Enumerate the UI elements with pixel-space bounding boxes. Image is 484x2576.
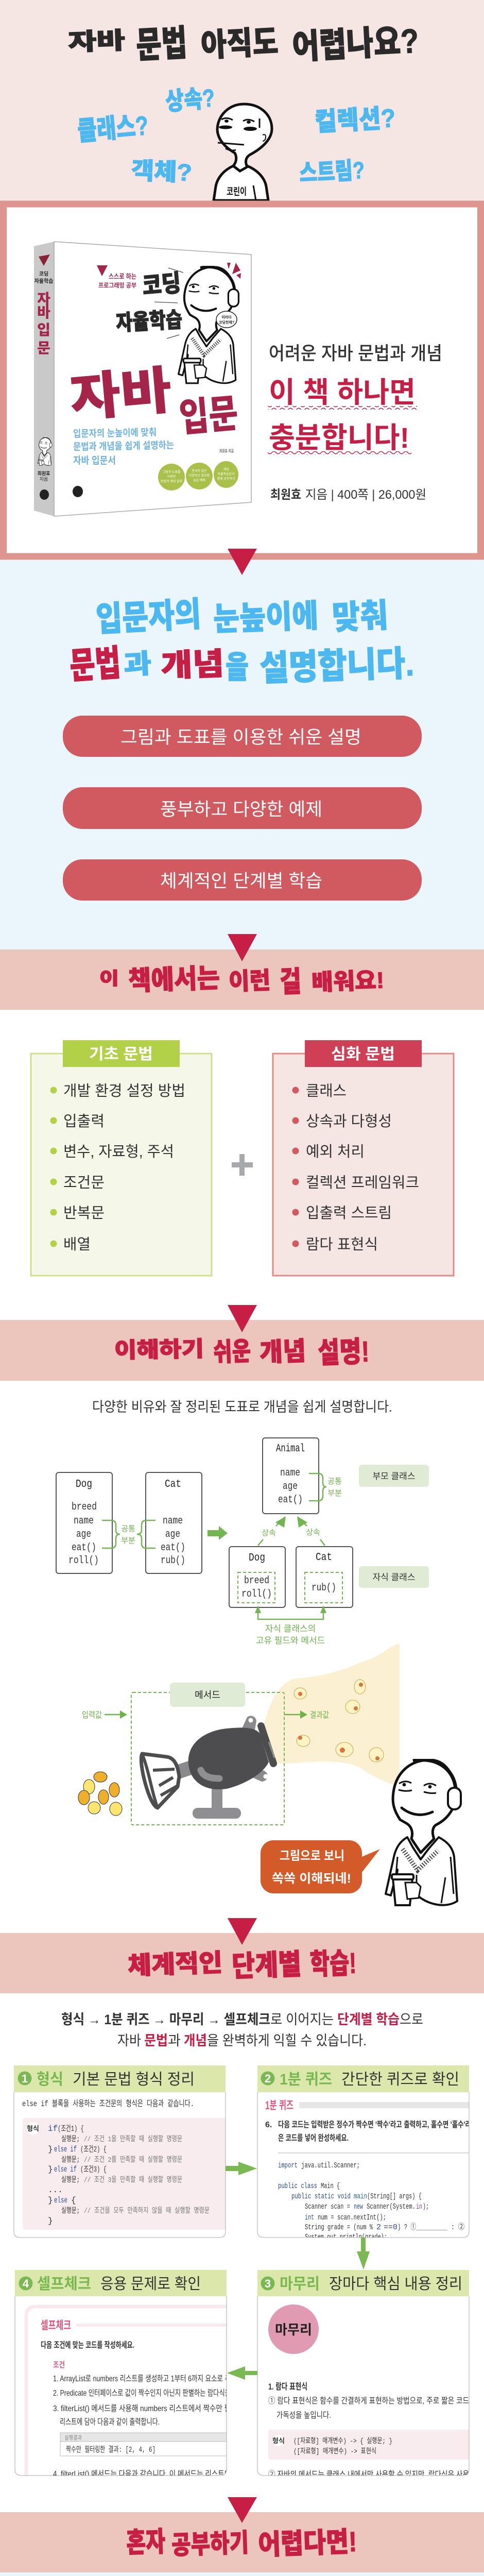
panel: step 4 self check: 4 xyxy=(23,2277,29,2290)
panel: step 1 format: // 조건 2를 만족할 때 실행할 명령문 xyxy=(84,2156,182,2164)
heading: step learning: 학습! xyxy=(309,1946,357,1981)
panel: step 2 quiz: == xyxy=(384,2223,393,2232)
panel: advanced grammar: 람다 표현식 xyxy=(306,1236,378,1253)
title: java grammar still hard: 자바 xyxy=(67,27,126,56)
text: step description: 로 이어지는 xyxy=(270,2012,334,2027)
book: java intro cover: 문법과 개념 설명 xyxy=(161,479,182,483)
icon: character kkorini: 코린이 xyxy=(227,186,247,197)
book: java intro cover: 다양하고 풍부한 xyxy=(189,473,210,478)
panel: basic grammar: 개발 환경 설정 방법 xyxy=(63,1083,185,1099)
panel: basic grammar: 입출력 xyxy=(63,1113,105,1130)
panel: step 2 quiz: System.out.println(grade); xyxy=(305,2233,387,2242)
heading: explain grammar and concepts: 문법 xyxy=(68,643,122,686)
book: java intro cover: 이용한 xyxy=(167,474,176,479)
panel: step 1 format: 실행문; xyxy=(61,2207,80,2215)
heading: explain grammar and concepts: 과 xyxy=(123,649,152,680)
panel: step 4 self check: 짝수만 필터링한 결과: [2, 4, 6] xyxy=(66,2445,155,2454)
heading: easy concepts: 이해하기 xyxy=(114,1336,204,1363)
panel: book frame xyxy=(3,204,481,556)
book: java intro cover: 한국어 같은 xyxy=(192,469,207,473)
heading: what you learn: 이 xyxy=(99,969,119,989)
panel: step 2 quiz: 6. xyxy=(265,2121,272,2129)
panel: step 1 format: else xyxy=(54,2196,67,2205)
panel: step 4 self check: 응용 문제로 확인 xyxy=(100,2276,201,2293)
panel: step 1 format: if xyxy=(48,2124,58,2133)
panel: step 1 format: else if xyxy=(54,2145,77,2154)
arrow: triangle xyxy=(228,1918,257,1945)
question words: 상속? xyxy=(164,84,216,116)
book: java intro cover: 코딩 xyxy=(141,269,182,299)
diagram: class inheritance: breed xyxy=(244,1575,269,1587)
panel: basic grammar: 배열 xyxy=(63,1236,91,1253)
book: java intro cover: 자율학습 xyxy=(115,308,183,335)
panel: step 2 quiz: 1분 퀴즈 xyxy=(265,2099,293,2112)
panel: step 2 quiz: num = scan.nextInt(); xyxy=(318,2213,386,2222)
book: java intro cover: 바 xyxy=(37,304,50,320)
text: step description: 과 xyxy=(168,2033,181,2048)
feature pills: 풍부하고 다양한 예제 xyxy=(160,800,322,820)
panel: step 1 format: else if 블록을 사용하는 조건문의 형식은 다음과 같습니다. xyxy=(22,2099,194,2109)
panel: step 3 summary: 형식 xyxy=(272,2437,285,2445)
diagram: class inheritance: eat() xyxy=(161,1542,185,1554)
panel: basic grammar: 변수, 자료형, 주석 xyxy=(63,1143,174,1160)
panel: step 4 self check: 셀프체크 xyxy=(41,2319,71,2332)
callout: speech bubble: 쏙쏙 이해되네! xyxy=(272,1872,351,1886)
question words: 클래스? xyxy=(76,111,150,147)
section background: concept xyxy=(0,560,484,950)
text: step description: 개념 xyxy=(184,2033,207,2048)
panel: step 4 self check: 1. ArrayList로 numbers 리스트를 생성하고 1부터 6까지 요소로 추 xyxy=(53,2374,231,2383)
title: java grammar still hard: 문법 xyxy=(135,23,188,66)
question words: 객체? xyxy=(131,157,193,186)
book: java intro cover: 스스로 하는 xyxy=(109,273,136,280)
diagram: class inheritance: age xyxy=(76,1529,91,1540)
panel: advanced grammar: 심화 문법 xyxy=(331,1046,395,1063)
panel: step 2 quiz: import xyxy=(278,2161,298,2170)
book: java intro cover: 실습 예제 xyxy=(193,478,205,482)
panel: step 1 format: else if xyxy=(54,2165,77,2174)
panel: basic grammar: 반복문 xyxy=(63,1205,105,1222)
diagram: class inheritance: name xyxy=(280,1467,300,1479)
feature pills: 그림과 도표를 이용한 쉬운 설명 xyxy=(120,727,361,748)
panel: step 3 summary: ([자료형] 매개변수) -> 표현식 xyxy=(293,2447,376,2456)
panel: step 3 summary: 가독성을 높입니다. xyxy=(276,2411,331,2420)
arrow: step 2 to 3 xyxy=(357,2238,370,2269)
heading: studying alone xyxy=(126,2527,357,2561)
panel: step 2 quiz: Scanner(System. xyxy=(367,2202,416,2211)
heading: step learning: 체계적인 xyxy=(127,1950,223,1980)
panel: step 3 summary: 마무리 xyxy=(275,2322,312,2337)
panel: step 2 quiz: 0 xyxy=(393,2223,397,2232)
panel: step 4 self check: 리스트에 담아 다음과 같이 출력합니다. xyxy=(60,2417,160,2427)
arrow: triangle xyxy=(228,1305,257,1332)
panel: step 2 quiz: Scanner scan = xyxy=(305,2202,350,2211)
band: easy concepts xyxy=(0,1320,484,1381)
panel: step 3 summary: 마무리 xyxy=(280,2276,320,2293)
panel: step 1 format: 형식 xyxy=(27,2125,39,2132)
heading: easy concepts xyxy=(114,1335,370,1369)
panel: step 1 format: (조건1) { xyxy=(58,2124,84,2133)
diagram: class inheritance: Animal xyxy=(276,1443,305,1455)
panel: step 1 format xyxy=(14,2065,229,2238)
heading: easy concepts: 설명! xyxy=(317,1335,370,1369)
panel: step 4 self check xyxy=(15,2270,235,2479)
heading: explain grammar and concepts: 개념 xyxy=(160,647,224,683)
diagram: class inheritance: Cat xyxy=(165,1479,181,1490)
diagram: class inheritance: rub() xyxy=(161,1555,185,1567)
feature pills xyxy=(63,716,422,901)
text: step description: 자바 xyxy=(117,2033,141,2048)
heading: explain grammar and concepts: 설명합니다. xyxy=(259,644,414,688)
arrow: triangle xyxy=(228,934,257,961)
heading: what you learn: 책에서는 xyxy=(128,963,220,996)
panel: advanced grammar xyxy=(273,1040,454,1276)
panel: step 2 quiz: in xyxy=(416,2202,422,2211)
panel: step 4 self check: 셀프체크 xyxy=(37,2276,91,2293)
panel: step 1 format: 실행문; xyxy=(61,2176,80,2184)
question words xyxy=(76,84,396,187)
panel: step 2 quiz: public static void xyxy=(291,2192,351,2201)
icon: person with headphones xyxy=(386,1760,461,1905)
heading: easy concepts: 쉬운 xyxy=(213,1337,251,1367)
panel: step 2 quiz: 2 xyxy=(376,2223,381,2232)
panel: basic grammar xyxy=(31,1040,212,1276)
heading: studying alone: 어렵다면! xyxy=(257,2527,357,2561)
panel: step 4 self check: 2. Predicate 인터페이스로 값이 짝수인지 아닌지 판별하는 람다식을 xyxy=(53,2388,231,2398)
book info: headline: 충분합니다! xyxy=(269,421,409,454)
text: step description: 문법 xyxy=(144,2033,168,2048)
book: java intro cover: 함께 공부하기 xyxy=(217,477,235,481)
panel: step 2 quiz: int xyxy=(305,2213,314,2222)
panel: step 1 format: // 조건을 모두 만족하지 않을 때 실행할 명령문 xyxy=(84,2207,210,2215)
panel: step 1 format: { xyxy=(71,2196,76,2205)
panel: step 1 format: // 조건 3을 만족할 때 실행할 명령문 xyxy=(84,2176,182,2184)
book: java intro cover: 코딩 xyxy=(39,271,48,277)
diagram: class inheritance: 자식 클래스 xyxy=(373,1572,415,1582)
text: step description: 을 완벽하게 익힐 수 있습니다. xyxy=(207,2033,367,2048)
panel: step 1 format: (조건2) { xyxy=(80,2145,107,2154)
diagram: class inheritance: name xyxy=(163,1515,183,1527)
callout: speech bubble xyxy=(261,1840,380,1893)
title: java grammar still hard: 어렵나요? xyxy=(291,22,420,66)
diagram: class inheritance: 공통 xyxy=(327,1477,342,1486)
panel: step 1 format: } xyxy=(48,2216,53,2226)
panel: basic grammar: 기초 문법 xyxy=(89,1046,153,1063)
diagram: class inheritance: breed xyxy=(72,1501,97,1513)
arrow: triangle xyxy=(228,2497,257,2523)
heading: studying alone: 공부하기 xyxy=(171,2528,249,2560)
panel: step 1 format: (조건3) { xyxy=(80,2165,107,2174)
diagram: class inheritance xyxy=(56,1438,429,1646)
panel: step 1 format: ... xyxy=(48,2185,63,2195)
heading: explain grammar and concepts: 눈높이에 xyxy=(213,598,319,638)
diagram: class inheritance: 부분 xyxy=(327,1489,342,1498)
book: java intro cover: 입문자의 눈높이에 맞춰 xyxy=(73,427,157,439)
panel: step 4 self check: 다음 조건에 맞는 코드를 작성하세요. xyxy=(41,2341,134,2350)
diagram: class inheritance: name xyxy=(74,1515,94,1527)
diagram: class inheritance: age xyxy=(165,1529,180,1540)
illustration: popcorn method machine: 메서드 xyxy=(195,1690,220,1700)
panel: step 2 quiz: 1분 퀴즈 xyxy=(280,2071,332,2088)
book: java intro cover: 지음 xyxy=(40,477,48,482)
book: java intro cover: 입 xyxy=(37,322,50,338)
panel: advanced grammar: 예외 처리 xyxy=(306,1144,365,1160)
illustration: popcorn method machine xyxy=(78,1643,400,1825)
book: java intro cover: 자바 xyxy=(67,362,174,428)
panel: step 1 format: 형식 xyxy=(37,2071,63,2088)
panel: step 1 format: 기본 문법 형식 정리 xyxy=(73,2071,195,2088)
band: what you learn xyxy=(0,950,484,1010)
band: step learning xyxy=(0,1933,484,1993)
panel: step 4 self check: 4. filterList() 메서드는 다음과 같습니다. 이 메서드는 리스트의 xyxy=(53,2469,231,2479)
heading: step learning xyxy=(127,1946,357,1982)
book info: headline: 어려운 자바 문법과 개념 xyxy=(269,343,442,364)
text: concept description: 다양한 비유와 잘 정리된 도표로 개념을 쉽게 설명합니다. xyxy=(92,1399,392,1415)
diagram: class inheritance: age xyxy=(283,1481,298,1493)
heading: explain grammar and concepts xyxy=(68,595,414,688)
title: java grammar still hard xyxy=(67,22,420,66)
diagram: class inheritance: 부모 클래스 xyxy=(373,1471,415,1481)
arrow: step 3 to 4 xyxy=(227,2366,257,2380)
diagram: class inheritance: eat() xyxy=(278,1494,303,1506)
icon: character kkorini xyxy=(214,104,272,200)
panel: step 2 quiz: 2 xyxy=(265,2072,271,2085)
panel: step 2 quiz: Main { xyxy=(321,2182,340,2191)
illustration: popcorn method machine: 입력값 xyxy=(82,1710,102,1720)
callout: speech bubble: 그림으로 보니 xyxy=(280,1849,344,1863)
book: java intro cover xyxy=(34,242,251,516)
panel: step 2 quiz: 간단한 퀴즈로 확인 xyxy=(341,2071,459,2088)
panel: step 2 quiz: (String[] args) { xyxy=(367,2192,422,2201)
panel: step 2 quiz xyxy=(257,2065,471,2242)
section background: cafe xyxy=(0,2572,484,2576)
diagram: class inheritance: 상속 xyxy=(306,1528,320,1537)
diagram: class inheritance: roll() xyxy=(241,1588,272,1600)
panel: step 4 self check: 실행결과 xyxy=(64,2434,82,2441)
panel: step 1 format: } xyxy=(48,2145,53,2154)
panel: step 1 format: // 조건 1을 만족할 때 실행할 명령문 xyxy=(84,2135,182,2144)
panel: step 2 quiz: : ② xyxy=(451,2223,464,2232)
panel: step 1 format: 실행문; xyxy=(61,2156,80,2164)
panel: step 2 quiz: ) ? ① xyxy=(397,2223,416,2232)
heading: step learning: 단계별 xyxy=(231,1948,302,1982)
diagram: class inheritance: 상속 xyxy=(262,1529,276,1537)
diagram: class inheritance: rub() xyxy=(312,1582,336,1594)
book: java intro cover: 이러다 xyxy=(221,315,232,319)
panel: advanced grammar: 클래스 xyxy=(306,1083,347,1099)
feature pills: 체계적인 단계별 학습 xyxy=(160,871,322,891)
panel: step 2 quiz: public class xyxy=(278,2182,317,2191)
heading: explain grammar and concepts: 입문자의 xyxy=(95,595,202,638)
arrow: step 1 to 2 xyxy=(226,2162,257,2175)
panel: step 2 quiz: String grade = (num % xyxy=(305,2223,373,2232)
panel: step 3 summary xyxy=(257,2270,474,2479)
panel: advanced grammar: 컬렉션 프레임워크 xyxy=(306,1174,419,1191)
book: java intro cover: 프로그래밍 공부 xyxy=(98,281,136,289)
title: java grammar still hard: 아직도 xyxy=(200,24,279,64)
panel: step 3 summary: 장마다 핵심 내용 정리 xyxy=(329,2276,462,2293)
book: java intro cover: 최원효 지음 xyxy=(219,448,234,453)
heading: easy concepts: 개념 xyxy=(259,1336,306,1367)
book: java intro cover: 개념 xyxy=(223,467,229,471)
panel: advanced grammar: 입출력 스트림 xyxy=(306,1205,392,1222)
heading: explain grammar and concepts: 맞춰 xyxy=(331,597,389,637)
book info: headline: 이 책 하나면 xyxy=(269,376,416,409)
heading: what you learn: 배워요! xyxy=(311,968,385,995)
book: java intro cover: 문법과 개념을 쉽게 설명하는 xyxy=(73,439,174,453)
panel: step 2 quiz: 은 코드를 넣어 완성하세요. xyxy=(278,2133,349,2143)
arrow: triangle xyxy=(228,549,257,575)
book: java intro cover: 자바 입문서 xyxy=(73,455,116,466)
section background: question xyxy=(0,0,484,201)
text: step description xyxy=(61,2012,423,2048)
panel: step 3 summary: 3 xyxy=(265,2277,271,2290)
heading: explain grammar and concepts: 을 xyxy=(226,650,249,685)
book info: author page price: 지음 | 400쪽 | 26,000원 xyxy=(305,488,426,502)
heading: what you learn: 걸 xyxy=(279,965,302,998)
panel: basic grammar: 조건문 xyxy=(63,1175,105,1191)
book: java intro cover: 자율학습단서 xyxy=(217,472,235,476)
book: java intro cover: 코딩천재? xyxy=(219,320,234,325)
panel: step 2 quiz: java.util.Scanner; xyxy=(301,2161,360,2170)
diagram: class inheritance: roll() xyxy=(68,1555,99,1567)
book: java intro cover: 그림과 도표를 xyxy=(163,470,181,474)
icon: plus xyxy=(232,1154,253,1176)
diagram: class inheritance: Dog xyxy=(249,1552,265,1564)
book: java intro cover: 문 xyxy=(37,340,50,356)
diagram: class inheritance: 자식 클래스의 xyxy=(265,1624,316,1634)
diagram: class inheritance: eat() xyxy=(72,1542,96,1554)
diagram: class inheritance: 공통 xyxy=(121,1524,135,1533)
panel: step 2 quiz: new xyxy=(354,2202,363,2211)
book info: author page price: 최원효 xyxy=(270,488,301,502)
panel: step 2 quiz: main xyxy=(354,2192,367,2201)
panel: step 2 quiz: ); xyxy=(423,2202,429,2211)
text: step description: 으로 xyxy=(400,2012,423,2027)
panel: step 4 self check: 조건 xyxy=(53,2361,65,2369)
panel: step 3 summary: 1. 람다 표현식 xyxy=(268,2382,307,2392)
book: java intro cover: 자 xyxy=(37,291,50,307)
panel: step 1 format: } xyxy=(48,2196,53,2205)
book: java intro cover: 입문 xyxy=(178,392,240,440)
diagram: class inheritance: Cat xyxy=(316,1552,332,1564)
panel: step 1 format: 1 xyxy=(22,2072,28,2085)
text: step description: 단계별 학습 xyxy=(337,2012,400,2027)
heading: what you learn: 이런 xyxy=(228,967,271,995)
band: studying alone xyxy=(0,2512,484,2572)
panel: step 4 self check: 3. filterList() 메서드를 사용해 numbers 리스트에서 짝수만 필 xyxy=(53,2404,231,2413)
book: java intro cover: 최원효 xyxy=(38,470,50,476)
book: java intro cover: 자율학습 xyxy=(34,278,53,284)
panel: step 3 summary: ([자료형] 매개변수) -> { 실행문; } xyxy=(293,2437,392,2446)
panel: advanced grammar: 상속과 다형성 xyxy=(306,1113,392,1130)
text: step description: 형식 → 1분 퀴즈 → 마무리 → 셀프체크 xyxy=(61,2012,270,2027)
illustration: popcorn method machine: 결과값 xyxy=(310,1710,329,1720)
question words: 컬렉션? xyxy=(314,104,396,137)
book info: headline xyxy=(268,343,442,455)
diagram: class inheritance: 고유 필드와 메서드 xyxy=(256,1636,325,1646)
panel: step 1 format: 실행문; xyxy=(61,2135,80,2144)
heading: studying alone: 혼자 xyxy=(126,2527,166,2558)
question words: 스트림? xyxy=(299,157,365,187)
heading: what you learn xyxy=(99,963,385,998)
panel: step 1 format: } xyxy=(48,2165,53,2174)
diagram: class inheritance: Dog xyxy=(76,1479,92,1490)
diagram: class inheritance: 부분 xyxy=(121,1536,135,1545)
